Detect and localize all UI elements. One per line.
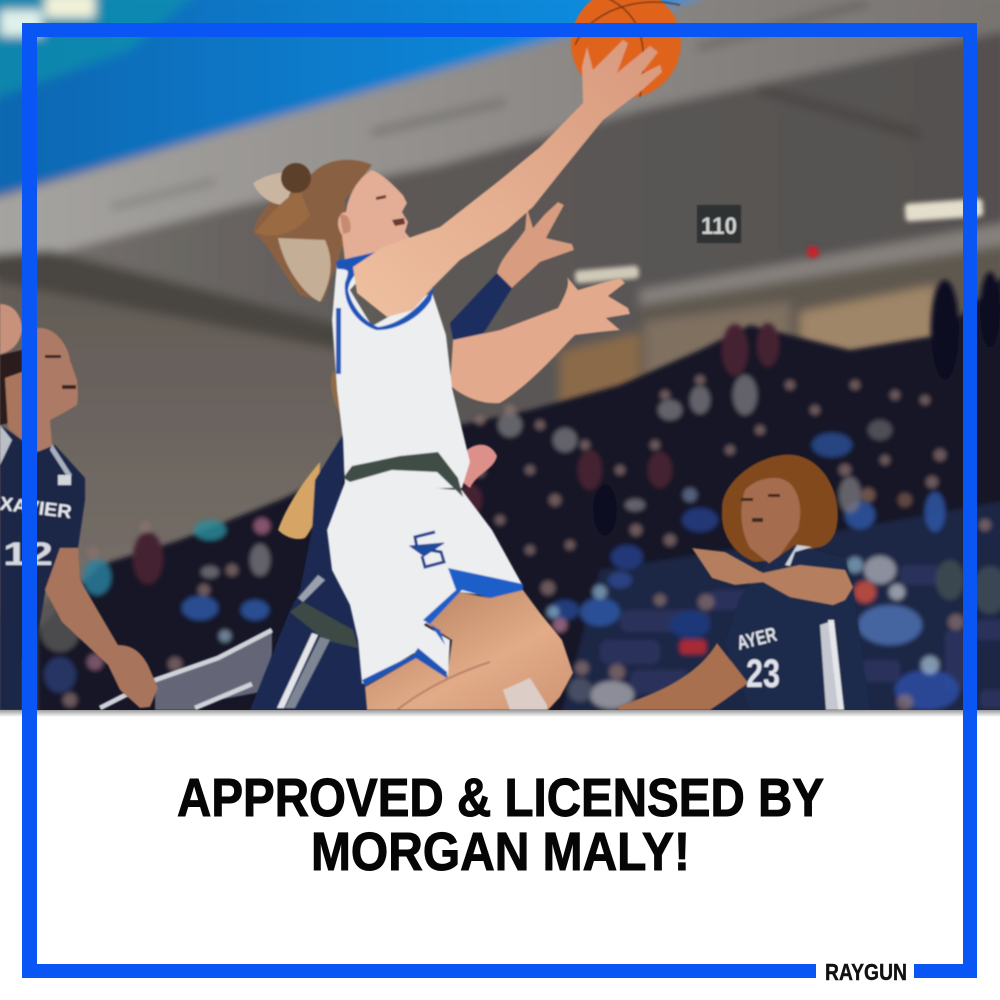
jersey number 23: 23	[746, 652, 780, 696]
arena background	[0, 0, 1000, 720]
defender shorts stripes	[277, 633, 318, 708]
left player arm	[45, 548, 158, 708]
left player jersey	[0, 425, 85, 710]
right player arm across chest	[692, 548, 853, 605]
railing	[100, 630, 272, 710]
brand wordmark: RAYGUN	[825, 959, 907, 985]
jersey lettering AYER: AYER	[735, 624, 779, 655]
right player lower arm	[617, 643, 748, 710]
headline: APPROVED & LICENSED BY	[177, 768, 824, 828]
hair and head, left of frame	[0, 350, 22, 425]
defender behind main player	[250, 370, 497, 710]
right player jersey	[725, 545, 870, 710]
player hair	[253, 160, 372, 302]
crowd in the stands	[37, 198, 1000, 720]
player far arm	[450, 277, 630, 403]
knee bandage	[503, 678, 547, 710]
jersey number 12: 12	[3, 536, 53, 572]
shorts logo	[410, 532, 444, 567]
player raised arm	[353, 40, 662, 317]
defender navy uniform	[250, 428, 368, 710]
jersey blue trim	[337, 251, 433, 329]
right Xavier player	[617, 454, 870, 710]
defender hand behind	[462, 445, 497, 488]
right player face	[741, 478, 800, 566]
photo bottom shadow	[0, 710, 1000, 717]
player waistband	[343, 452, 463, 497]
player shorts	[327, 482, 523, 684]
photo: basketball game	[0, 0, 1000, 720]
right player hair	[722, 454, 838, 562]
main player	[253, 0, 681, 710]
section sign 110	[697, 205, 741, 243]
player legs	[365, 590, 573, 710]
shorts blue hem	[423, 568, 523, 645]
headline	[177, 768, 824, 882]
section sign 110: 110	[701, 213, 737, 240]
defender raised hand	[497, 202, 574, 288]
player face and neck	[338, 170, 410, 262]
defender arm sleeve	[449, 274, 512, 340]
defender waistband	[290, 602, 358, 648]
headline: MORGAN MALY!	[311, 822, 690, 882]
player jersey	[332, 251, 470, 490]
left player face	[37, 328, 78, 455]
left Xavier player	[0, 304, 158, 710]
basketball	[571, 0, 681, 98]
jersey lettering XAVIER: XAVIER	[0, 494, 73, 523]
elbow of off-frame teammate	[0, 304, 22, 354]
blond ponytail	[278, 462, 320, 539]
